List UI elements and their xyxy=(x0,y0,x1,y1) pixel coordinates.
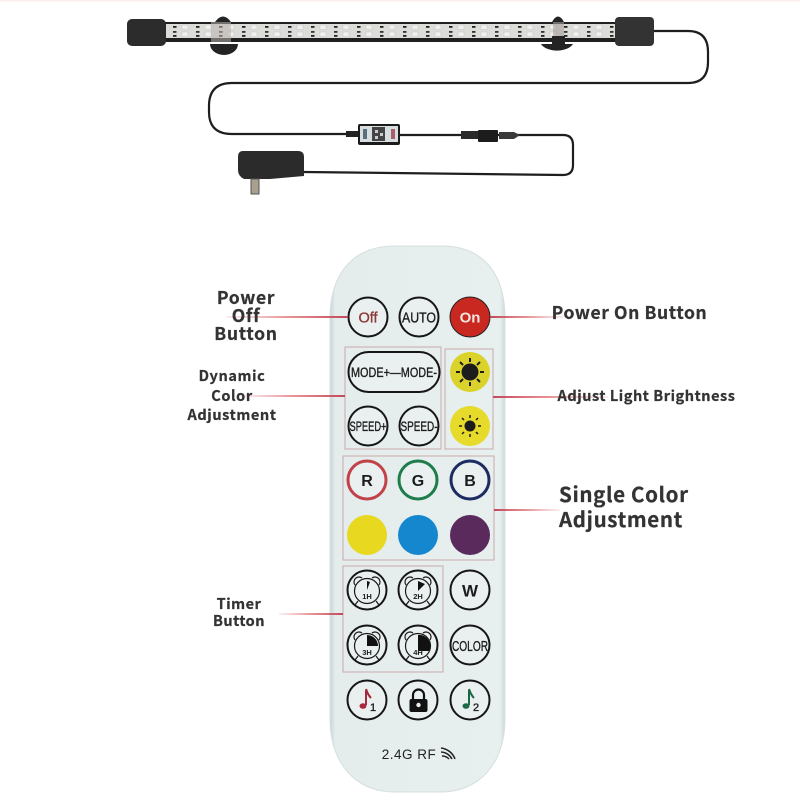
button: G xyxy=(399,461,437,499)
button: B: B xyxy=(464,473,476,490)
button: purple xyxy=(450,515,490,555)
label: brightness: Adjust Light Brightness xyxy=(556,385,736,406)
tube xyxy=(160,22,620,42)
callout line: power off xyxy=(226,316,348,318)
remote control xyxy=(330,246,505,792)
label: power on: Power On Button xyxy=(552,300,707,325)
button: off: Off xyxy=(358,310,379,326)
button: music 2 xyxy=(450,680,490,720)
button: music 1: 1 xyxy=(370,702,376,714)
button: 3H: 3H xyxy=(362,648,372,657)
label: dynamic color: Color xyxy=(211,385,253,406)
button: B xyxy=(451,461,489,499)
button: mode: MODE+—MODE- xyxy=(351,364,437,380)
group: single colors xyxy=(343,456,494,560)
button: 4H: 4H xyxy=(413,648,423,657)
button: 2H: 2H xyxy=(413,592,423,601)
button: auto: AUTO xyxy=(402,310,436,326)
label: dynamic color: Dynamic xyxy=(199,365,265,386)
button: color: COLOR xyxy=(452,638,488,655)
left end cap xyxy=(127,19,166,46)
inline controller with QR code xyxy=(346,124,400,145)
label: single color: Adjustment xyxy=(558,503,683,533)
group: brightness xyxy=(445,349,493,449)
button: speed minus: SPEED- xyxy=(400,418,438,434)
button: brightness up xyxy=(450,352,490,392)
button: music 1 xyxy=(348,680,386,720)
suction cup right xyxy=(541,16,573,51)
button: lock xyxy=(398,680,438,720)
callout line: dynamic color xyxy=(240,395,345,397)
label: single color: Single Color xyxy=(559,478,689,508)
button: W xyxy=(450,570,490,610)
callout line: power on xyxy=(490,316,565,318)
suction cup left xyxy=(210,16,238,55)
label: timer: Button xyxy=(213,610,265,631)
remote branding: 2.4G RF xyxy=(382,747,436,762)
right end cap xyxy=(615,17,654,46)
button: W: W xyxy=(462,582,479,600)
button: off xyxy=(348,298,388,336)
label: power off: Off xyxy=(232,303,261,328)
group: dynamic mode and speed xyxy=(345,347,441,449)
button: speed plus: SPEED+ xyxy=(350,418,386,434)
cable connector xyxy=(461,130,520,142)
button: color xyxy=(450,626,490,664)
button: 1H: 1H xyxy=(362,592,372,601)
label: timer: Timer xyxy=(217,593,262,614)
remote body xyxy=(330,246,505,792)
power adapter xyxy=(238,151,304,194)
button: auto xyxy=(400,298,438,336)
LED light bar xyxy=(127,16,654,55)
callout line: timer xyxy=(279,613,343,615)
callout line: single color xyxy=(494,509,560,511)
button: music 2: 2 xyxy=(473,702,479,714)
callout line: brightness xyxy=(493,396,608,398)
label: power off: Power xyxy=(217,285,275,310)
button: brightness down xyxy=(450,406,490,446)
button: on: On xyxy=(460,310,480,326)
button: on xyxy=(450,297,490,337)
cable xyxy=(209,31,708,175)
button: G: G xyxy=(412,473,424,490)
group: timers xyxy=(343,566,443,672)
button: R: R xyxy=(361,473,373,490)
label: dynamic color: Adjustment xyxy=(186,404,277,425)
button: R xyxy=(348,461,386,499)
label: power off: Button xyxy=(214,321,278,346)
button: blue xyxy=(398,515,438,555)
button: yellow xyxy=(347,515,387,555)
